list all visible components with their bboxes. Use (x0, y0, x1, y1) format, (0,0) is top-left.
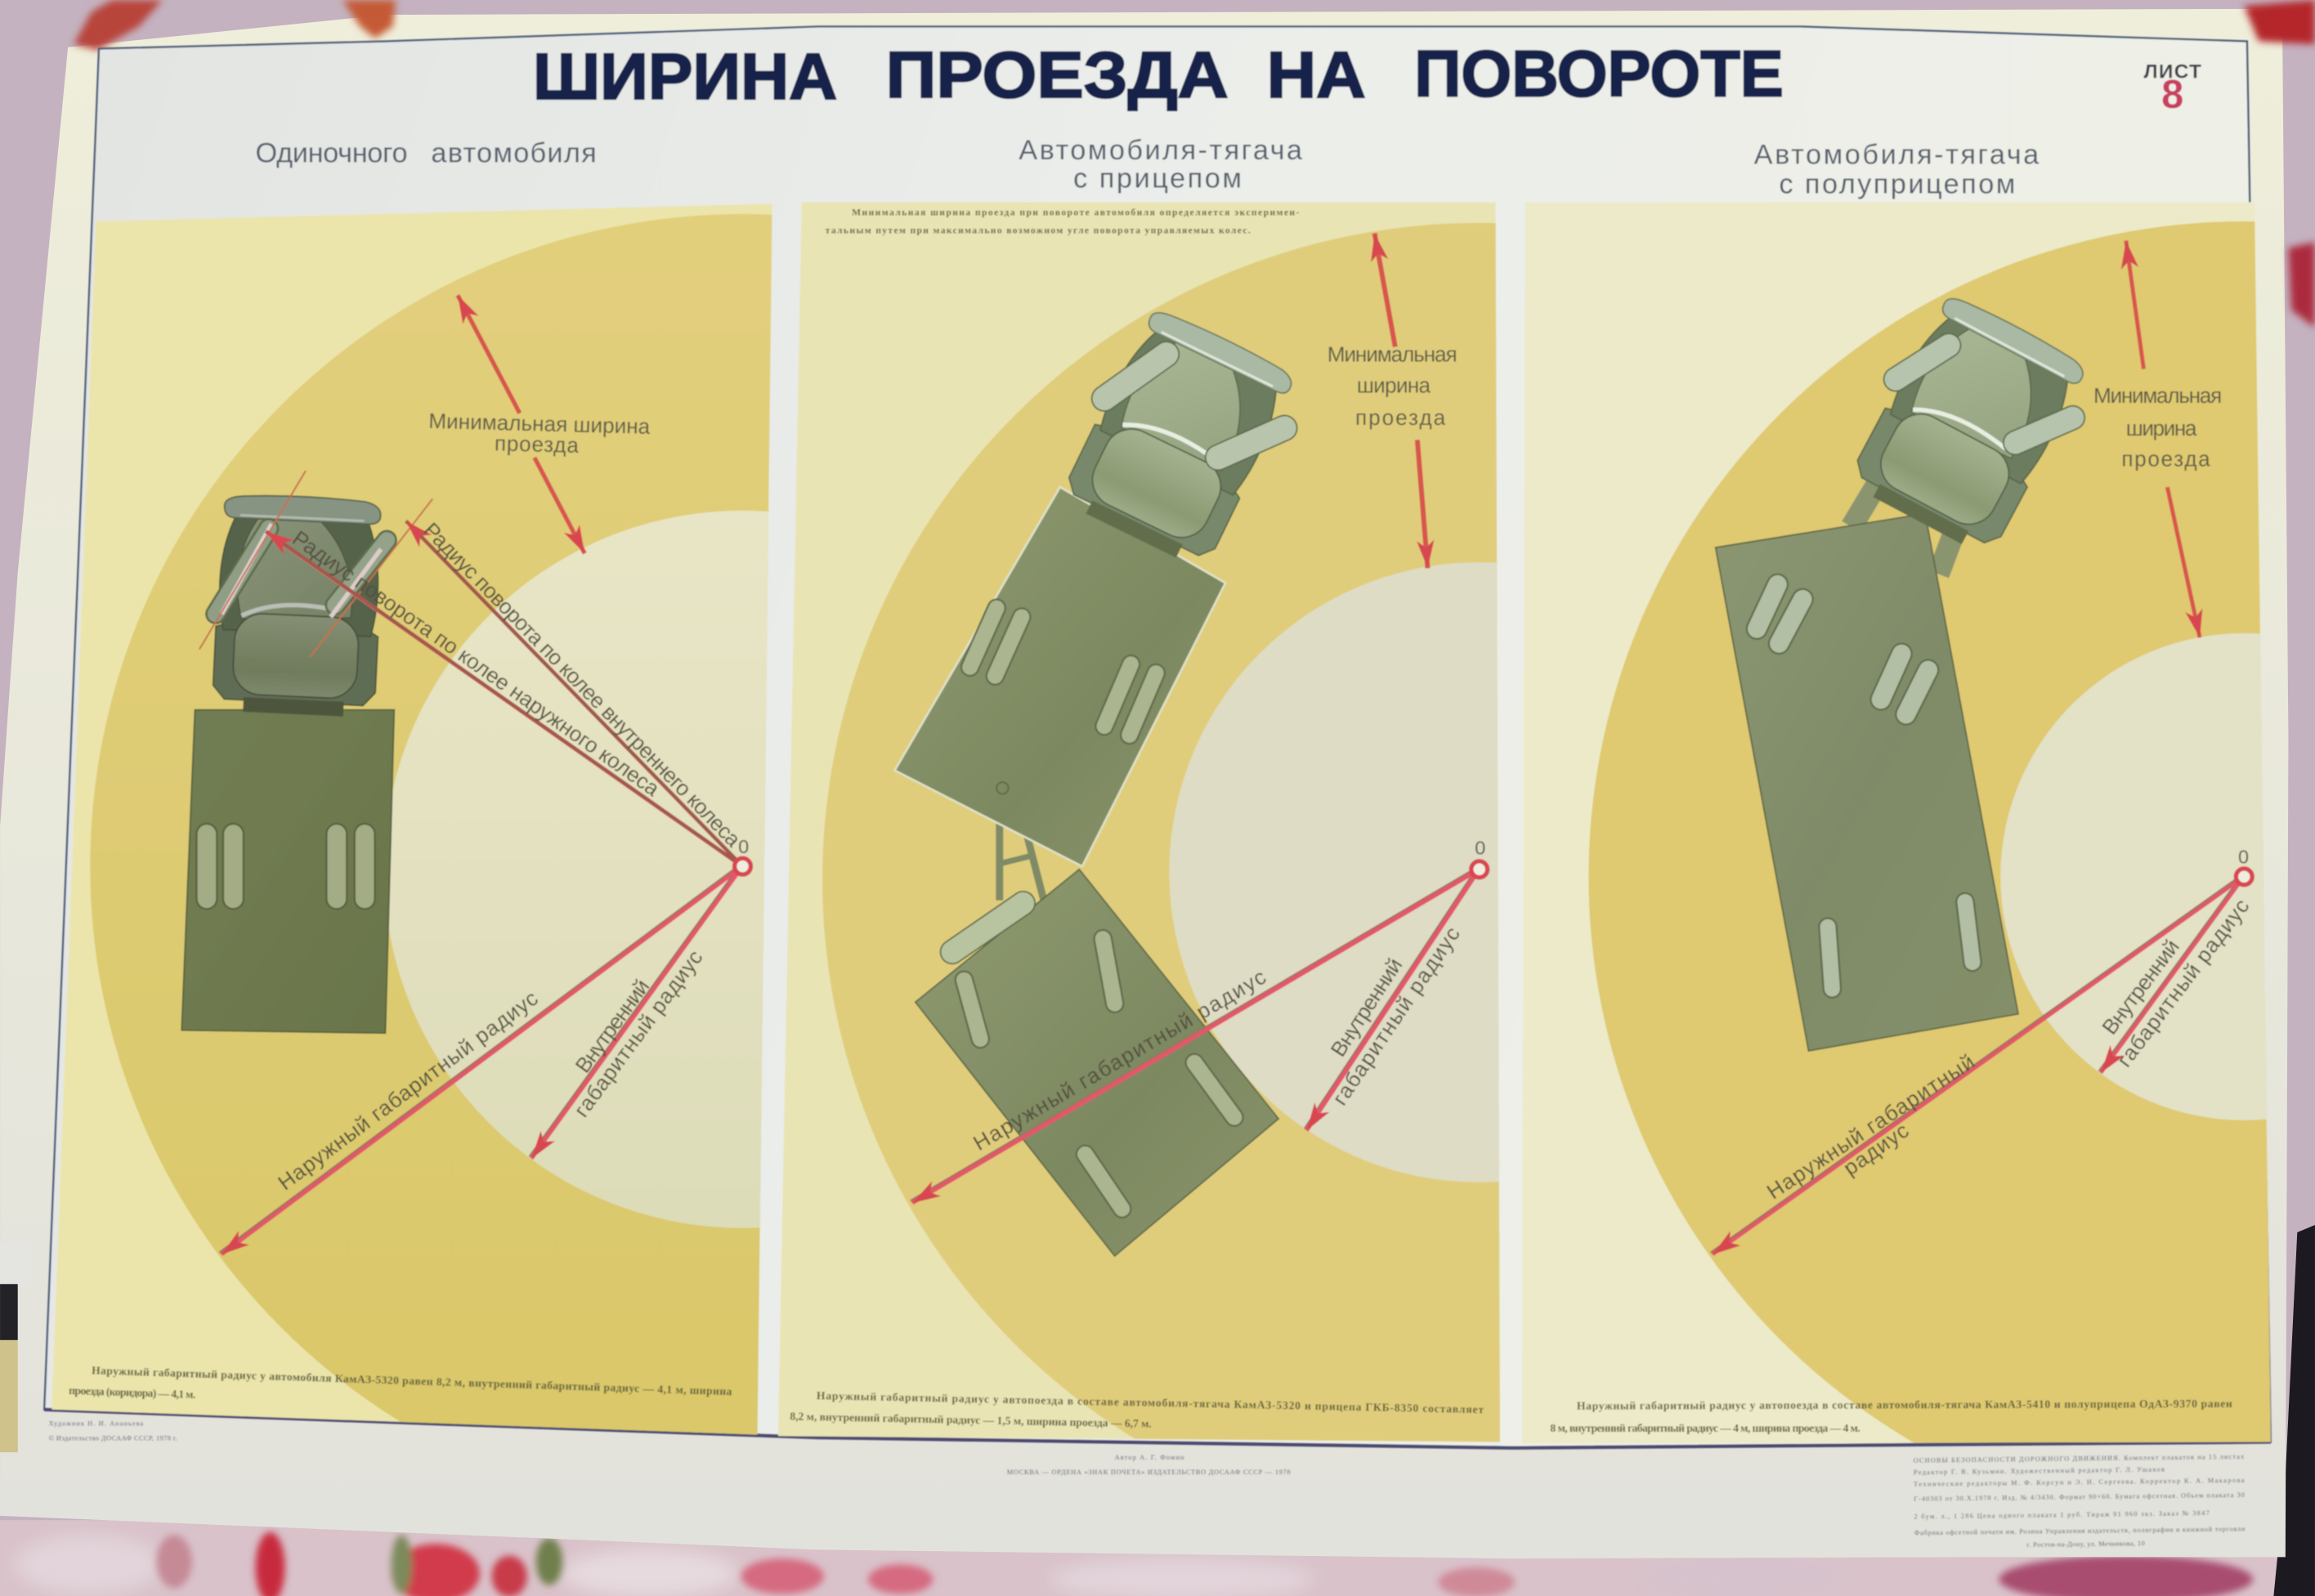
heading: single vehicle (255, 138, 597, 169)
imprint: left (49, 1420, 177, 1442)
object at the left edge (0, 1243, 33, 1452)
imprint: centre: МОСКВА — ОРДЕНА «ЗНАК ПОЧЕТА» ИЗДАТЕЛЬСТВО ДОСААФ СССР — 1978 (1007, 1469, 1291, 1476)
arrows: outer and inner overall radius (1711, 875, 2244, 1254)
note: Наружный габаритный радиус у автопоезда в составе автомобиля-тягача КамАЗ-5410 и полуприцепа ОдАЗ-9370 равен (1577, 1397, 2232, 1412)
centre point O: 0 (2238, 847, 2249, 868)
centre point O: 0 (738, 836, 749, 857)
label: inner wheel turn radius: Радиус поворота по колее внутреннего колеса (419, 517, 746, 852)
semitrailer (1716, 514, 2018, 1051)
heading: single vehicle: Одиночного (255, 138, 408, 169)
label: outer overall radius: радиус (1838, 1118, 1913, 1180)
explanatory text: Минимальная ширина проезда при повороте автомобиля определяется эксперимен- (852, 208, 1300, 218)
label: inner overall radius: габаритный радиус (2111, 894, 2254, 1071)
label: minimum passage width: Минимальная ширина (428, 409, 651, 439)
arrows: minimum passage width (1374, 233, 1428, 568)
truck cab (1846, 290, 2091, 559)
hands holding the poster (74, 0, 2315, 328)
note (1550, 1397, 2232, 1434)
centre point O: 0 (1475, 838, 1485, 859)
imprint: left: © Издательство ДОСААФ СССР, 1978 г. (49, 1435, 177, 1442)
note: Наружный габаритный радиус у автомобиля КамАЗ-5320 равен 8,2 м, внутренний габаритный радиус — 4,1 м, ширина (92, 1364, 732, 1397)
label: minimum passage width: Минимальная (2093, 383, 2222, 408)
heading: tractor with semitrailer (1754, 139, 2040, 200)
imprint: centre (1007, 1454, 1291, 1476)
heading: single vehicle: автомобиля (431, 138, 597, 169)
imprint: right: Фабрика офсетной печати им. Розина Управления издательств, полиграфии и книжной торговли (1914, 1525, 2246, 1536)
label: minimum passage width: ширина (1357, 373, 1431, 397)
truck cab (199, 471, 432, 718)
coupling bars (1852, 483, 1956, 574)
centre point O (1471, 838, 1488, 878)
label: minimum passage width: ширина (2126, 416, 2197, 440)
truck cab (1058, 304, 1300, 571)
panel: tractor with semitrailer (1522, 201, 2272, 1444)
note: 8 м, внутренний габаритный радиус — 4 м, ширина проезда — 4 м. (1550, 1422, 1861, 1434)
title: ШИРИНА (533, 40, 837, 113)
note (69, 1364, 732, 1419)
label: outer overall radius: Наружный габаритный радиус (969, 964, 1270, 1156)
note: Наружный габаритный радиус у автопоезда в составе автомобиля-тягача КамАЗ-5320 и прицепа ГКБ-8350 составляет (817, 1389, 1484, 1415)
imprint: right: 2 бум. л., 1 286 Цена одного плаката 1 руб. Тираж 91 960 экз. Заказ № 3847 (1914, 1509, 2210, 1520)
truck body (181, 710, 394, 1033)
sheet number (2143, 61, 2201, 117)
label: minimum passage width: проезда (1355, 405, 1446, 430)
trailer (916, 870, 1278, 1256)
label: minimum passage width (2093, 383, 2222, 472)
note (790, 1389, 1484, 1430)
label: minimum passage width (428, 409, 651, 459)
note: проезда (коридора) — 4,1 м. (69, 1384, 196, 1402)
heading: tractor with trailer: Автомобиля-тягача (1019, 135, 1303, 166)
imprint: right: ОСНОВЫ БЕЗОПАСНОСТИ ДОРОЖНОГО ДВИЖЕНИЯ. Комплект плакатов на 15 листах (1914, 1453, 2245, 1464)
label: inner overall radius: Внутренний (571, 975, 654, 1077)
label: minimum passage width: Минимальная (1328, 342, 1458, 366)
label: inner overall radius: Внутренний (2097, 935, 2184, 1039)
imprint: right: Г-40303 от 30.X.1978 г. Изд. № 4/3430. Формат 90×60. Бумага офсетная. Объем плаката 30 (1914, 1491, 2245, 1503)
label: outer overall radius: Наружный габаритный радиус (273, 986, 543, 1195)
imprint: centre: Автор А. Г. Фомин (1115, 1454, 1184, 1461)
imprint: right (1914, 1453, 2246, 1550)
heading: tractor with semitrailer: с полуприцепом (1779, 169, 2015, 200)
explanatory text: тальным путем при максимально возможном угле поворота управляемых колес. (826, 226, 1251, 235)
turning corridor background (51, 203, 773, 1436)
imprint: right: Редактор Г. В. Кузьмин. Художественный редактор Г. Л. Ушаков (1914, 1466, 2165, 1476)
truck body (895, 487, 1225, 866)
centre point O (2236, 847, 2252, 885)
arrows: minimum passage width (2126, 240, 2200, 637)
heading: tractor with trailer (1019, 135, 1303, 194)
arrows: minimum passage width (458, 295, 584, 553)
radius lines to wheels (266, 521, 744, 870)
label: inner overall radius: Внутренний (1326, 954, 1408, 1061)
arrows: outer and inner overall radius (911, 868, 1480, 1203)
label: inner overall radius: габаритный радиус (1328, 923, 1465, 1110)
label: outer overall radius: Наружный габаритный (1762, 1049, 1979, 1204)
panel: tractor with trailer (777, 202, 1501, 1443)
explanatory text (826, 208, 1300, 235)
sheet number: 8 (2161, 73, 2183, 117)
title (533, 37, 1784, 113)
title: НА (1267, 38, 1366, 111)
arrows: outer and inner overall radius (220, 865, 742, 1254)
imprint: left: Художник Н. И. Ананьева (49, 1420, 144, 1428)
heading: tractor with semitrailer: Автомобиля-тягача (1754, 139, 2040, 170)
drawbar (1000, 815, 1044, 901)
centre point O (735, 836, 750, 874)
label: outer wheel turn radius: Радиус поворота по колее наружного колеса (288, 525, 665, 801)
note: 8,2 м, внутренний габаритный радиус — 1,5 м, ширина проезда — 6,7 м. (790, 1410, 1152, 1430)
turning corridor background (1522, 201, 2272, 1444)
sheet number: ЛИСТ (2143, 61, 2201, 83)
label: minimum passage width: проезда (2121, 447, 2210, 472)
turning corridor background (777, 202, 1501, 1443)
label: minimum passage width: проезда (495, 431, 580, 458)
imprint: right: г. Ростов-на-Дону, ул. Мечникова, 10 (2026, 1540, 2145, 1549)
title: ПРОЕЗДА (886, 38, 1229, 111)
label: minimum passage width (1328, 342, 1458, 430)
heading: tractor with trailer: с прицепом (1073, 163, 1242, 194)
title: ПОВОРОТЕ (1414, 37, 1784, 110)
imprint: right: Технические редакторы М. Ф. Корсун и Э. Н. Сергеева. Корректор К. А. Макарова (1914, 1477, 2245, 1488)
label: inner overall radius: габаритный радиус (569, 946, 707, 1122)
panel: single vehicle (51, 203, 773, 1436)
